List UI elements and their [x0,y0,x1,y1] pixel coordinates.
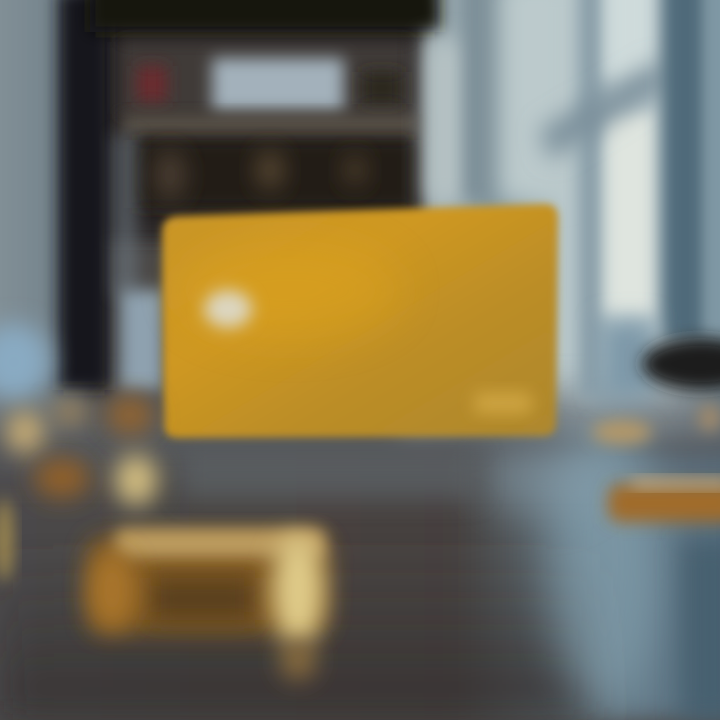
gold card [162,204,558,438]
gold objects at left [0,395,158,582]
gold block in foreground [88,528,328,680]
dark shelving unit [58,0,440,390]
card sheen [180,240,400,340]
blue glow at left edge [0,324,50,400]
card logo [474,392,532,414]
card chip [204,290,252,328]
floor: reflective dark surface [0,395,720,720]
gold objects at right [592,404,720,522]
card body [162,204,558,438]
dark lamp base at right edge [642,338,720,390]
window frames and pillars [425,0,720,400]
